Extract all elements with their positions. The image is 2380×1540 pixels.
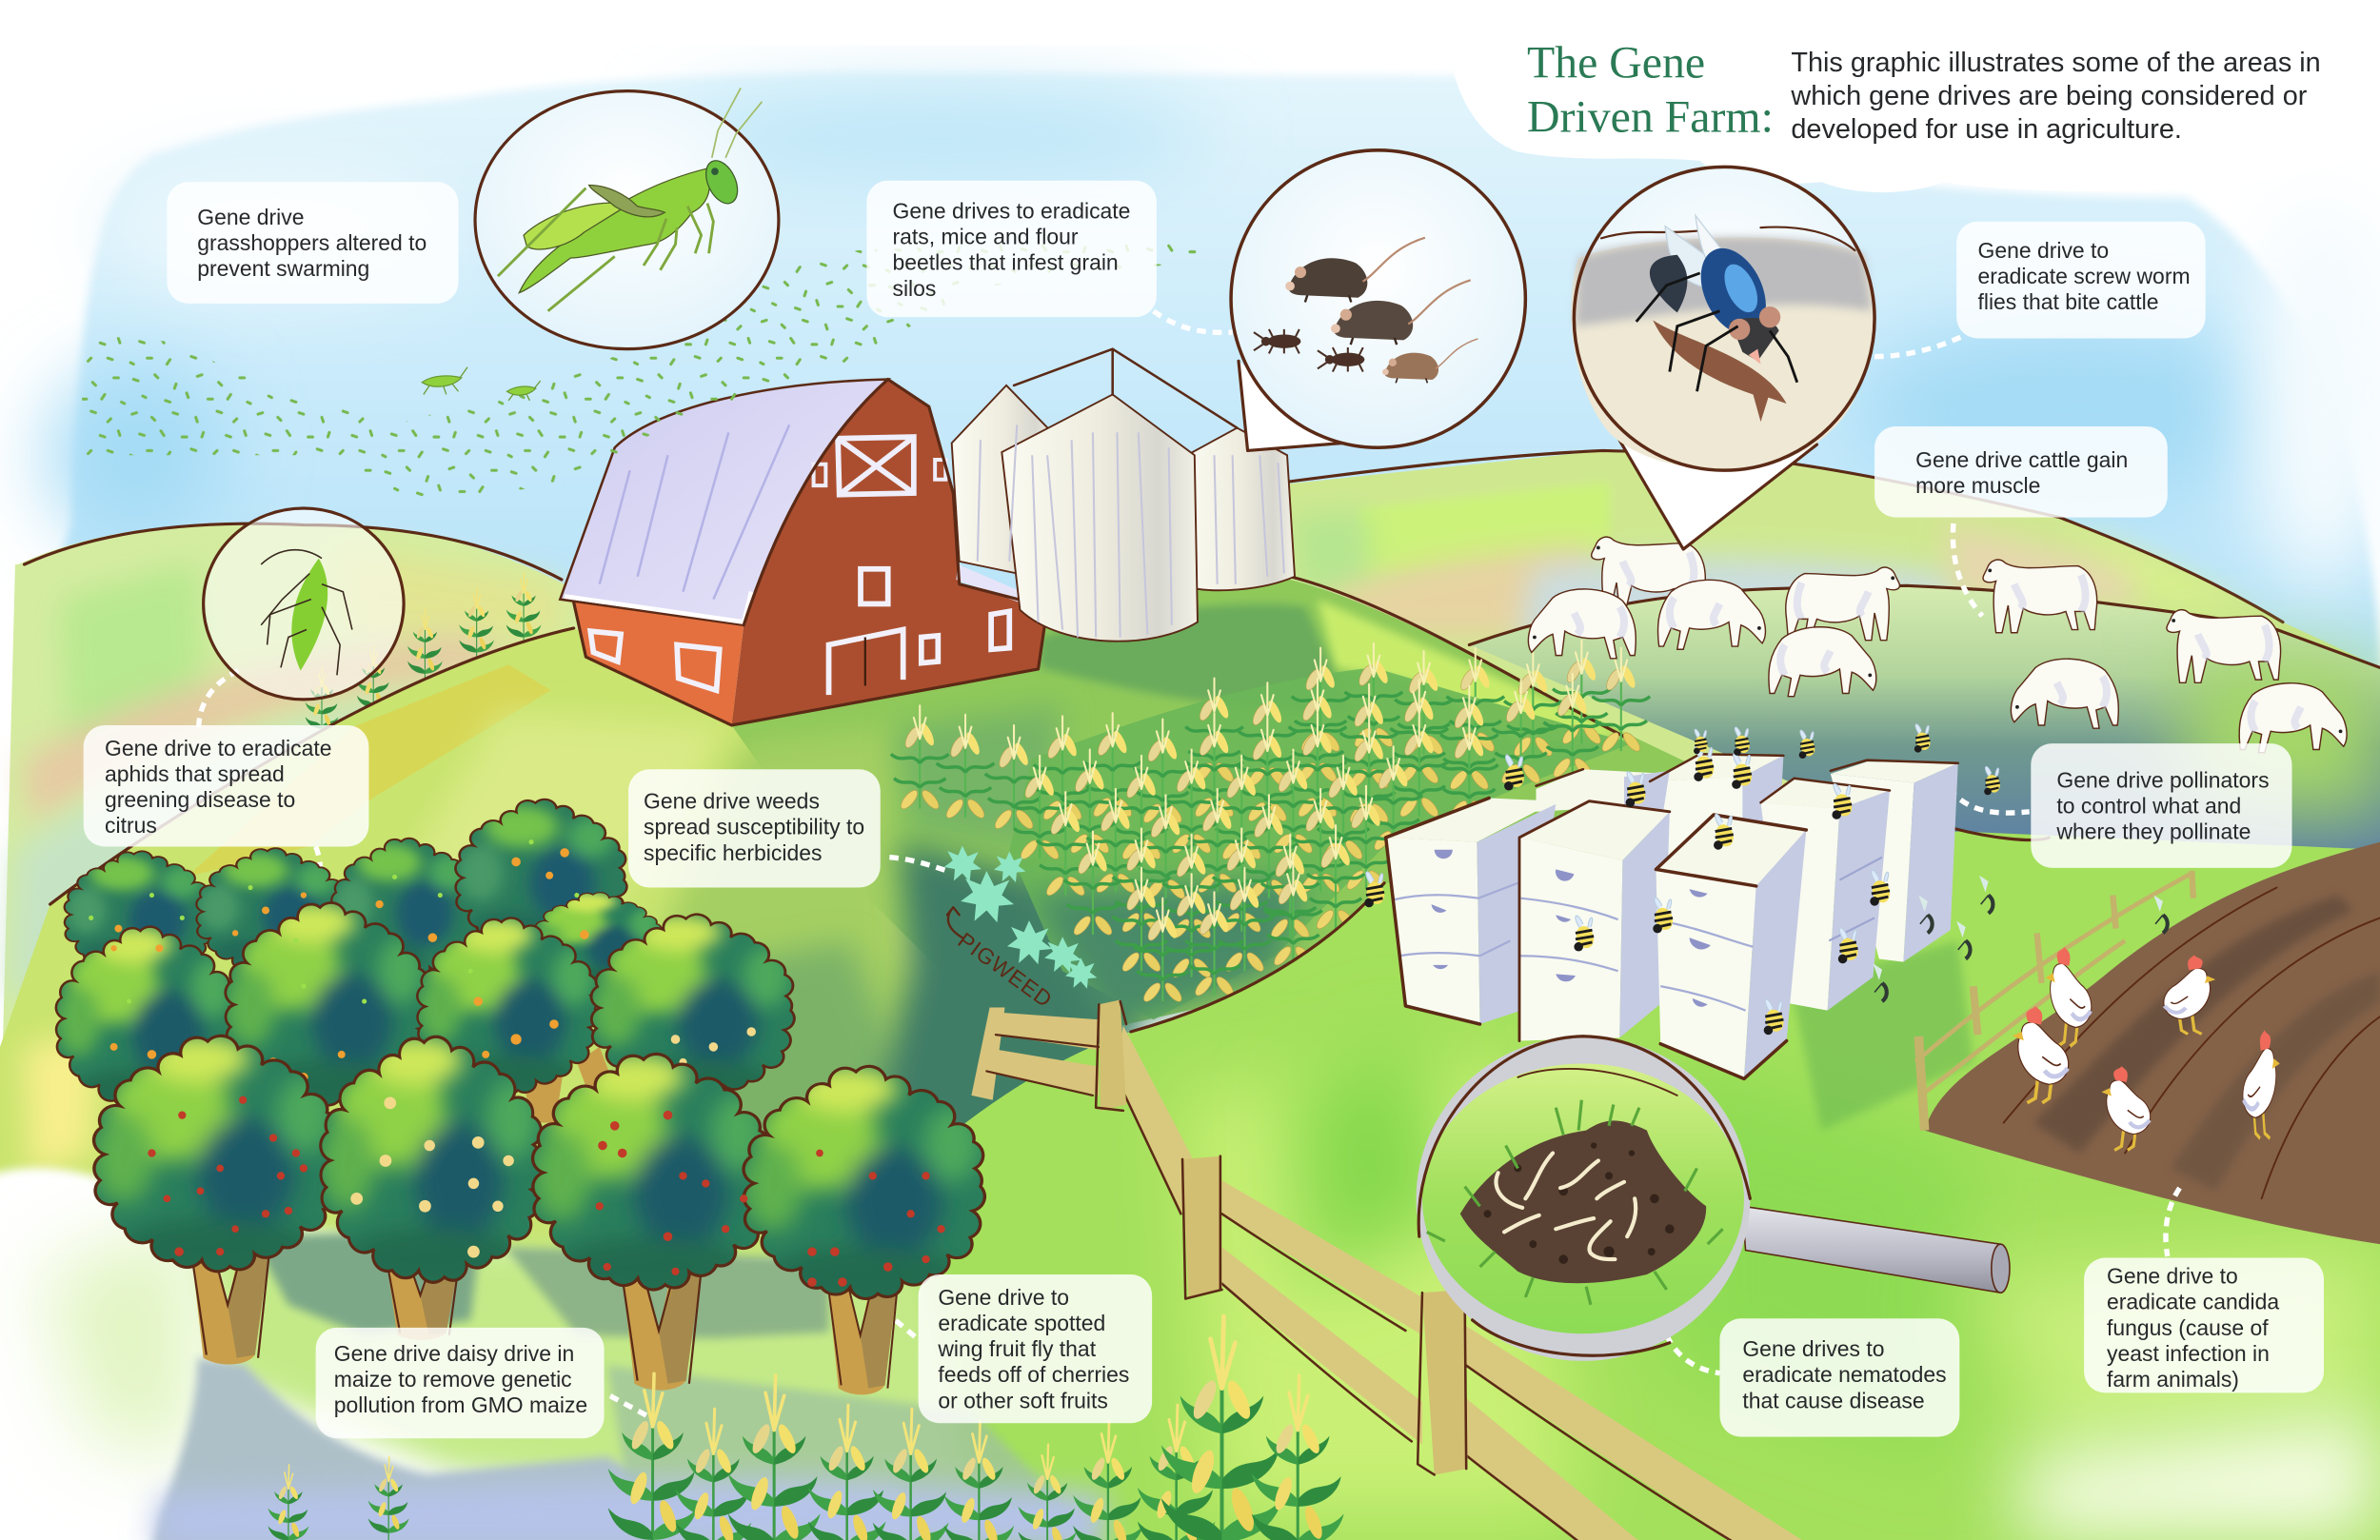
pigweed label: PIGWEED — [954, 928, 1058, 1013]
barn red gable — [731, 380, 1047, 725]
small corn on back hill — [306, 572, 541, 737]
callout: aphids — [84, 725, 368, 847]
callout: rats, mice and flour beetles: beetles that infest grain — [893, 250, 1119, 275]
callout: candida: eradicate candida — [2107, 1290, 2279, 1314]
aphid body — [261, 550, 352, 675]
fence: main rails — [1116, 1026, 1814, 1540]
silo: middle — [1002, 394, 1198, 642]
fence: posts — [1099, 1000, 1468, 1474]
callout: candida: farm animals) — [2107, 1367, 2239, 1392]
callout: pollinators: to control what and — [2056, 793, 2241, 818]
callout: aphids: citrus — [105, 813, 157, 838]
lower left ground — [0, 1168, 1108, 1540]
callout: spotted wing fruit fly: feeds off of cherries — [938, 1362, 1129, 1387]
callout: grasshoppers: grasshoppers altered to — [197, 230, 426, 255]
callout: weeds: spread susceptibility to — [644, 815, 864, 839]
pigweed arrow — [947, 907, 962, 938]
title: Driven Farm: — [1527, 92, 1774, 143]
callout: cattle — [1874, 426, 2168, 518]
magnifier lens — [1422, 1063, 1744, 1333]
callout: candida: fungus (cause of — [2107, 1315, 2269, 1340]
beehives — [1386, 754, 1958, 1078]
callout: weeds: specific herbicides — [644, 840, 822, 865]
fence: rail outlines — [1116, 1076, 1742, 1540]
hive front middle — [1519, 801, 1670, 1041]
chickens — [2013, 947, 2280, 1150]
callout: grasshoppers — [167, 182, 459, 304]
callout: spotted wing fruit fly: wing fruit fly that — [937, 1336, 1097, 1361]
foreground hill — [850, 828, 2380, 1540]
orchard front trees — [83, 1034, 998, 1394]
magnifier handle — [1742, 1206, 2010, 1293]
callout: rats, mice and flour beetles: rats, mice and flour — [893, 225, 1079, 249]
intro text: developed for use in agriculture. — [1791, 114, 2182, 145]
barn lavender roof — [560, 380, 888, 625]
sheep pasture — [1469, 585, 2380, 865]
bees and gnats — [1364, 724, 2168, 1035]
callout: rats, mice and flour beetles: Gene drives to eradicate — [893, 199, 1130, 224]
silo: right — [1187, 428, 1295, 590]
weed plants — [944, 846, 1097, 989]
hive back row — [1537, 754, 1783, 940]
barn hill — [607, 577, 1821, 1198]
callout: pollinators: where they pollinate — [2055, 819, 2251, 844]
callout: nematodes: Gene drives to — [1742, 1336, 1885, 1361]
callout: daisy drive in maize: Gene drive daisy drive in — [334, 1341, 574, 1366]
callout: grasshoppers: Gene drive — [197, 205, 304, 229]
callout: aphids: Gene drive to eradicate — [105, 736, 331, 760]
callout: spotted wing fruit fly — [919, 1274, 1152, 1423]
fence: left gate — [971, 1007, 1099, 1100]
callout: pollinators: Gene drive pollinators — [2056, 767, 2270, 792]
callout: nematodes: that cause disease — [1742, 1388, 1925, 1412]
barn orange side wall — [574, 602, 744, 725]
rat 1 — [1285, 238, 1425, 303]
callout: nematodes — [1719, 1318, 1959, 1437]
orchard back trees — [48, 798, 805, 1123]
inset: aphid — [204, 508, 404, 700]
small grasshoppers — [422, 367, 541, 401]
callout connector dashes — [199, 311, 2180, 1417]
callout: screw worm: Gene drive to — [1977, 238, 2109, 263]
field fence — [1915, 871, 2193, 1131]
callout: grasshoppers: prevent swarming — [197, 256, 369, 281]
callout: rats, mice and flour beetles — [866, 181, 1157, 317]
hive front left — [1386, 798, 1556, 1024]
intro text — [1790, 48, 2321, 145]
callout: weeds: Gene drive weeds — [644, 789, 820, 814]
callout: nematodes: eradicate nematodes — [1742, 1362, 1947, 1387]
worms — [1497, 1154, 1636, 1259]
callout: spotted wing fruit fly: or other soft fruits — [938, 1388, 1108, 1412]
title — [1527, 37, 1774, 143]
hive front centre — [1656, 815, 1806, 1078]
callout: screw worm: eradicate screw worm — [1977, 264, 2191, 288]
callout: weeds — [628, 769, 881, 888]
grain silos — [952, 349, 1295, 642]
inset: screw worm fly — [1571, 167, 1874, 549]
barn — [560, 380, 1050, 725]
fly — [1636, 215, 1797, 391]
ploughed field — [1925, 842, 2380, 1244]
callout: candida: yeast infection in — [2107, 1341, 2270, 1366]
grasshopper body — [498, 88, 762, 311]
callout: candida — [2084, 1257, 2324, 1392]
magnifier rim — [1417, 1037, 1750, 1361]
callout: cattle: more muscle — [1915, 473, 2040, 498]
title: The Gene — [1527, 37, 1705, 88]
callout: aphids: greening disease to — [105, 787, 295, 812]
rat 2 — [1331, 280, 1471, 345]
magnifying glass — [1417, 1037, 2010, 1361]
barn windows and door — [590, 569, 1009, 695]
corn field — [891, 641, 1650, 1032]
silo: left — [952, 385, 1057, 577]
flying grasshopper swarm — [82, 235, 1200, 501]
callout: daisy drive in maize — [316, 1328, 605, 1438]
soil mound — [1460, 1120, 1706, 1283]
grass tufts — [1427, 1100, 1723, 1305]
callout: spotted wing fruit fly: Gene drive to — [938, 1285, 1069, 1310]
intro text: This graphic illustrates some of the areas in — [1791, 48, 2321, 78]
callout: candida: Gene drive to — [2107, 1264, 2238, 1289]
callout: cattle: Gene drive cattle gain — [1915, 447, 2128, 472]
inset: grasshopper — [475, 88, 779, 349]
title cloud — [1454, 0, 2380, 192]
hive middle right — [1760, 779, 1890, 1011]
callout: screw worm — [1956, 222, 2206, 338]
inset: rodents and beetles — [1231, 150, 1525, 450]
foreground corn — [268, 1316, 1344, 1540]
hive far right — [1831, 760, 1958, 962]
sheep — [1528, 537, 2347, 753]
callout: screw worm: flies that bite cattle — [1977, 289, 2158, 314]
back left hill — [0, 523, 585, 1154]
callout: daisy drive in maize: pollution from GMO maize — [334, 1392, 587, 1417]
wooden fence — [971, 1000, 1814, 1540]
barn window X — [838, 437, 914, 495]
callout: spotted wing fruit fly: eradicate spotted — [938, 1311, 1105, 1335]
callout: pollinators — [2031, 743, 2292, 868]
cow hide — [1571, 237, 1874, 469]
flour beetles — [1254, 329, 1364, 372]
callout: aphids: aphids that spread — [105, 761, 285, 786]
intro text: which gene drives are being considered or — [1790, 81, 2308, 111]
back right hill — [1272, 450, 2380, 880]
mouse — [1382, 339, 1478, 383]
orchard hill — [0, 628, 1093, 1259]
barn lean-to roof — [956, 564, 1050, 611]
wound — [1653, 320, 1787, 422]
callout: rats, mice and flour beetles: silos — [893, 276, 936, 301]
pigweed — [944, 846, 1097, 1013]
callout: daisy drive in maize: maize to remove genetic — [334, 1367, 572, 1392]
